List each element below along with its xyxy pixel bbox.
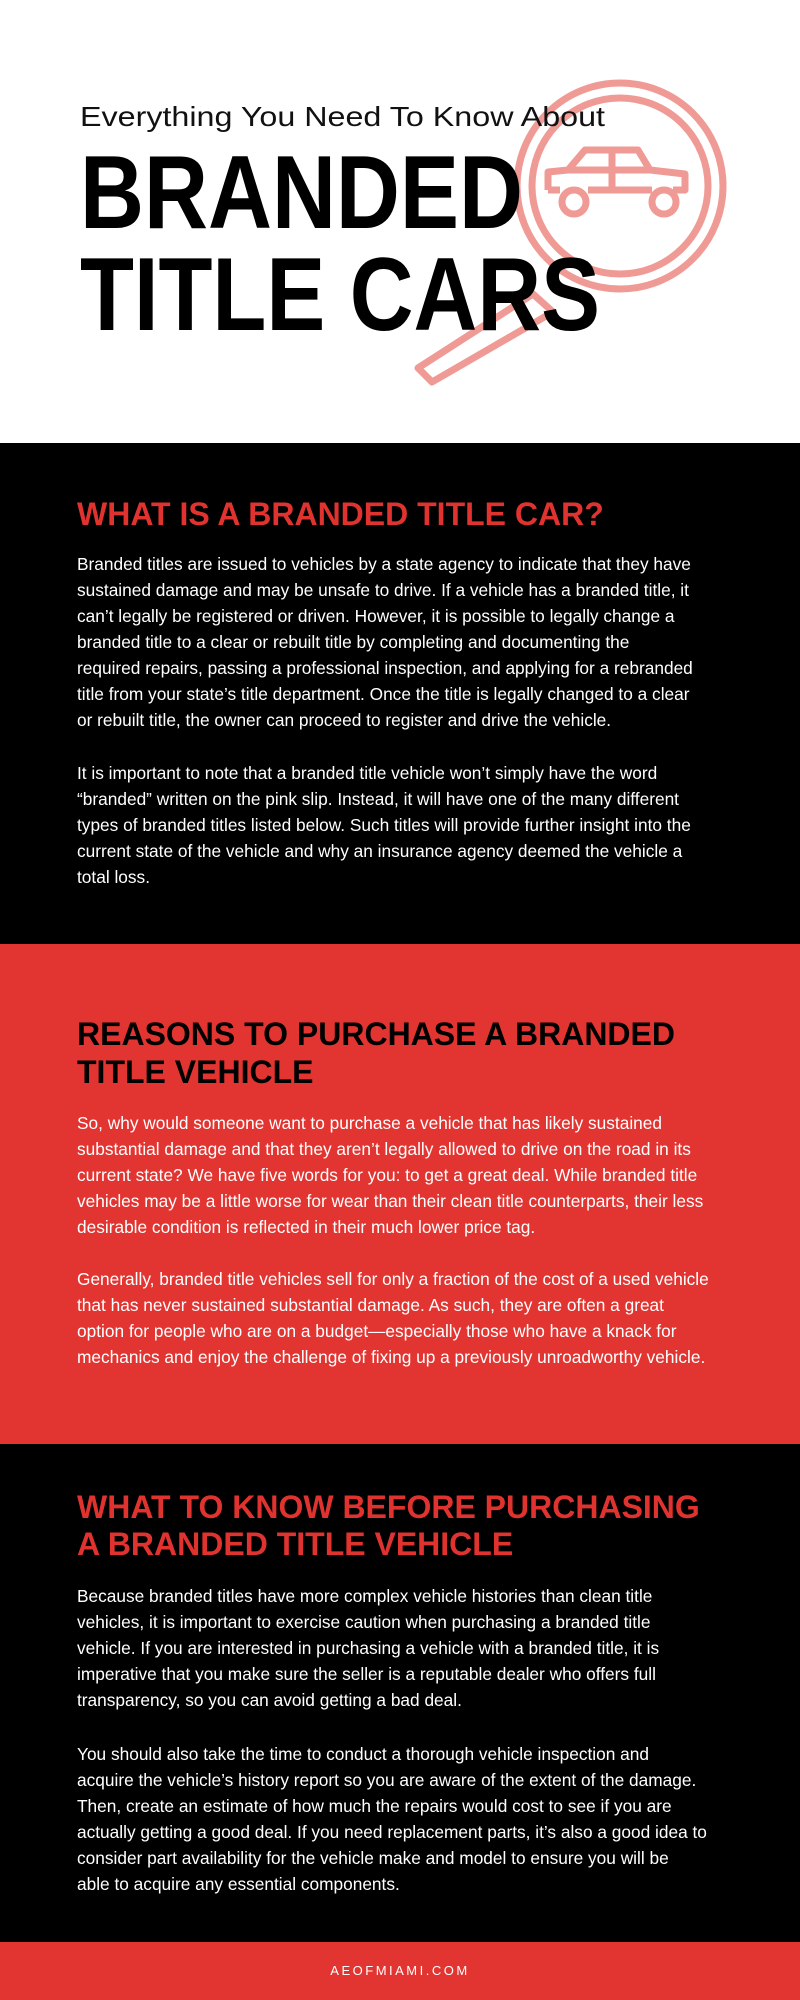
text block: substantial damage and that they aren’t legally allowed to drive on the road in its [77,1139,691,1159]
heading [77,1016,675,1090]
text block 2: Then, create an estimate of how much the repairs would cost to see if you are [77,1796,672,1816]
text block [77,1113,703,1237]
panel: reasons to purchase [0,944,800,1444]
text block 2: mechanics and enjoy the challenge of fixing up a previously unroadworthy vehicle. [77,1347,705,1367]
heading: A BRANDED TITLE VEHICLE [77,1526,513,1562]
text block 2 [77,1744,707,1894]
text block: desirable condition is reflected in their much lower price tag. [77,1217,535,1237]
text block: Because branded titles have more complex vehicle histories than clean title [77,1586,652,1606]
icon: magnifier with car [414,80,726,386]
title: BRANDED [80,135,523,251]
text block 2: able to acquire any essential components. [77,1874,400,1894]
text block 2: You should also take the time to conduct a thorough vehicle inspection and [77,1744,649,1764]
text block 2: “branded” written on the pink slip. Instead, it will have one of the many different [77,789,679,809]
text block 2: Generally, branded title vehicles sell for only a fraction of the cost of a used vehicle [77,1269,709,1289]
text block: transparency, so you can avoid getting a bad deal. [77,1690,462,1710]
heading: WHAT TO KNOW BEFORE PURCHASING [77,1489,700,1525]
panel: what to know before purchasing [0,1444,800,1942]
text block: required repairs, passing a professional inspection, and applying for a rebranded [77,658,693,678]
heading: REASONS TO PURCHASE A BRANDED [77,1016,675,1052]
text block [77,1586,659,1710]
text block: current state? We have five words for you: to get a great deal. While branded title [77,1165,697,1185]
text block: title from your state’s title department. Once the title is legally changed to a clear [77,684,690,704]
heading: WHAT IS A BRANDED TITLE CAR? [77,496,604,532]
header [0,0,800,443]
heading [77,1489,700,1562]
subtitle: Everything You Need To Know About [80,101,605,132]
text block: vehicle. If you are interested in purchasing a vehicle with a branded title, it is [77,1638,659,1658]
text block 2: consider part availability for the vehicle make and model to ensure you will be [77,1848,669,1868]
text block 2 [77,763,691,887]
text block: vehicles, it is important to exercise caution when purchasing a branded title [77,1612,650,1632]
footer [0,1942,800,2000]
text block 2: total loss. [77,867,150,887]
text block: vehicles may be a little worse for wear than their clean title counterparts, their less [77,1191,703,1211]
text block: or rebuilt title, the owner can proceed to register and drive the vehicle. [77,710,611,730]
text block: branded title to a clear or rebuilt title by completing and documenting the [77,632,629,652]
title [80,135,600,353]
heading: TITLE VEHICLE [77,1054,313,1090]
panel: what is a branded title car [0,443,800,944]
text block 2: option for people who are on a budget—especially those who have a knack for [77,1321,676,1341]
text block: imperative that you make sure the seller is a reputable dealer who offers full [77,1664,656,1684]
title: TITLE CARS [80,237,600,353]
text block 2: It is important to note that a branded title vehicle won’t simply have the word [77,763,657,783]
text block 2: acquire the vehicle’s history report so you are aware of the extent of the damage. [77,1770,696,1790]
text block 2: types of branded titles listed below. Such titles will provide further insight into the [77,815,691,835]
text block: Branded titles are issued to vehicles by a state agency to indicate that they have [77,554,691,574]
text block 2: that has never sustained substantial damage. As such, they are often a great [77,1295,664,1315]
text block 2: actually getting a good deal. If you need replacement parts, it’s also a good idea to [77,1822,707,1842]
text block: sustained damage and may be unsafe to drive. If a vehicle has a branded title, it [77,580,689,600]
text block: can’t legally be registered or driven. However, it is possible to legally change a [77,606,674,626]
text block: So, why would someone want to purchase a vehicle that has likely sustained [77,1113,662,1133]
footer: AEOFMIAMI.COM [330,1963,470,1978]
text block 2 [77,1269,709,1367]
text block [77,554,693,730]
text block 2: current state of the vehicle and why an insurance agency deemed the vehicle a [77,841,682,861]
